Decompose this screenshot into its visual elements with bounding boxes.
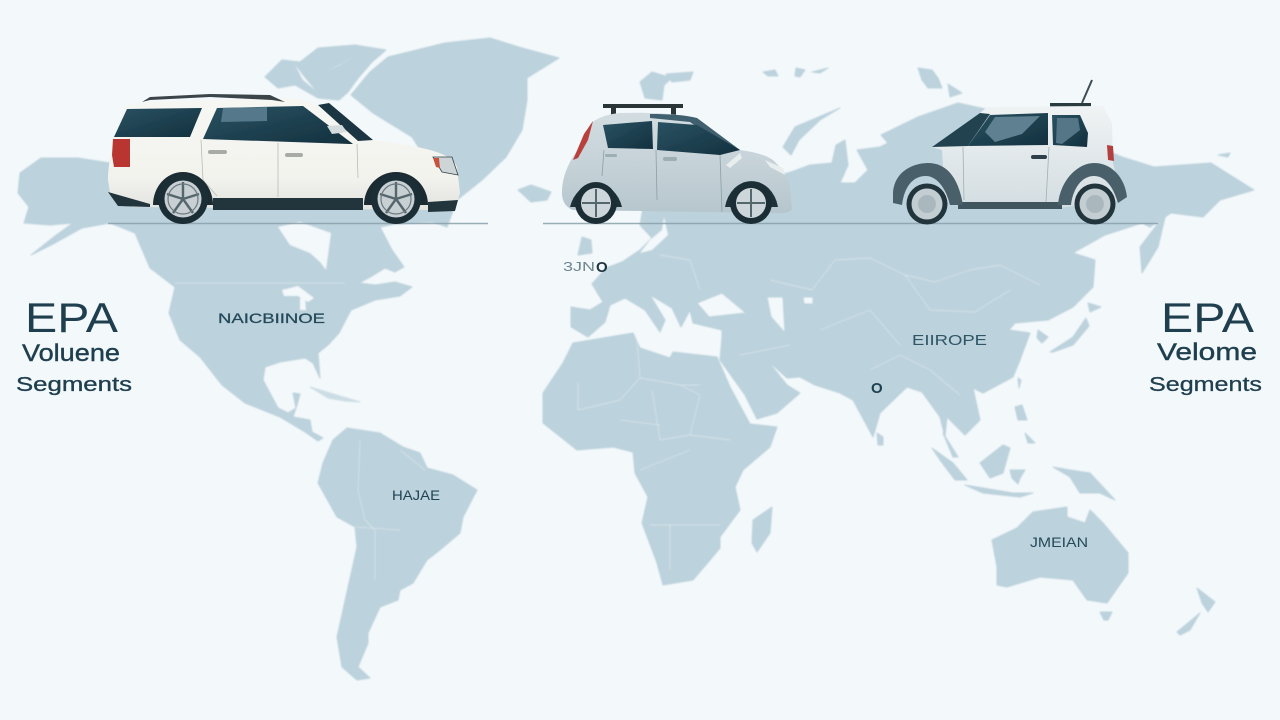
- SUV side windows: [203, 106, 353, 144]
- hatchback tail light: [573, 121, 593, 160]
- map label: North America: NAICBIINOE: [218, 310, 325, 326]
- continent: North America: [18, 115, 447, 441]
- ground line: [108, 222, 1158, 224]
- map label: UK marker: [563, 259, 608, 276]
- city car body: [932, 106, 1122, 208]
- continent: Eurasia: [571, 103, 1254, 437]
- water: Hudson Bay, Great Lakes, Baltic and Arctic channels: [278, 55, 668, 310]
- city car antenna and roof bar: [1050, 80, 1092, 106]
- car: white city car: [893, 80, 1127, 224]
- city car rear wheel: [1074, 184, 1116, 224]
- city car rear arch: [1058, 163, 1127, 205]
- SUV doors and handles: [201, 140, 358, 197]
- left heading block: [16, 294, 132, 396]
- SUV rear wheel: [158, 174, 208, 224]
- left subtitle Voluene: Voluene: [22, 340, 120, 367]
- hatchback body: [562, 113, 792, 213]
- continent: Africa: [543, 333, 777, 585]
- SUV wheel arches: [153, 172, 428, 205]
- map label: Europe: EIIROPE: [912, 333, 987, 349]
- hatchback front wheel: [730, 182, 772, 224]
- island: Madagascar: [752, 507, 772, 552]
- islands: Arctic: [640, 68, 1230, 157]
- hatchback roof rack: [603, 104, 683, 116]
- map label: India marker: O: [871, 380, 883, 397]
- hatchback wheel arches: [570, 181, 778, 207]
- right subtitle Velome: Velome: [1157, 339, 1257, 366]
- islands: Southeast Asia: [877, 378, 1115, 500]
- country borders: [175, 255, 1040, 580]
- continent: Australia: [992, 507, 1128, 603]
- map label: UK marker: 3JN: [563, 259, 595, 274]
- SUV windshield: [318, 103, 373, 141]
- car: white SUV: [108, 94, 460, 224]
- city car door lines and handle: [963, 147, 1049, 202]
- city car windshield: [932, 113, 990, 147]
- city car tail light: [1107, 145, 1114, 161]
- left title EPA: EPA: [25, 294, 118, 341]
- hatchback windows: [603, 121, 653, 149]
- city car sill: [958, 202, 1062, 209]
- SUV mirror: [327, 125, 347, 134]
- island: Novaya Zemlya: [783, 108, 840, 155]
- islands: Kamchatka and Japan: [1037, 213, 1166, 352]
- SUV lower trim: [108, 192, 458, 212]
- left subtitle Segments: Segments: [16, 374, 132, 396]
- island: United Kingdom: [578, 237, 592, 255]
- car: silver hatchback: [562, 104, 792, 224]
- hatchback door lines and handles: [602, 150, 722, 212]
- continent: Canadian Arctic islands: [265, 45, 386, 100]
- SUV front wheel: [371, 174, 421, 224]
- SUV headlight: [433, 157, 458, 175]
- right heading block: [1149, 294, 1262, 396]
- city car rear window: [1052, 115, 1088, 147]
- map label: Australia: JMEIAN: [1030, 534, 1088, 550]
- hatchback rear wheel: [575, 182, 617, 224]
- right title EPA: EPA: [1161, 294, 1254, 341]
- right subtitle Segments: Segments: [1149, 374, 1262, 396]
- SUV roof rack: [142, 94, 285, 102]
- island: Iceland: [518, 185, 551, 202]
- map label: UK marker: O: [596, 259, 608, 276]
- islands: Tasmania and New Zealand: [1100, 588, 1215, 635]
- city car front arch: [893, 163, 963, 205]
- islands: Caribbean: [310, 387, 360, 402]
- map label: South America: HAJAE: [392, 487, 440, 503]
- city car front wheel: [906, 184, 948, 224]
- city car door window: [968, 113, 1048, 146]
- SUV tail light: [112, 139, 130, 167]
- SUV rear window: [114, 108, 202, 137]
- SUV body: [108, 98, 460, 210]
- hatchback dark roof edge: [650, 114, 740, 150]
- continent: Greenland: [351, 38, 559, 227]
- hatchback headlight: [726, 153, 785, 175]
- continent: South America: [318, 428, 477, 680]
